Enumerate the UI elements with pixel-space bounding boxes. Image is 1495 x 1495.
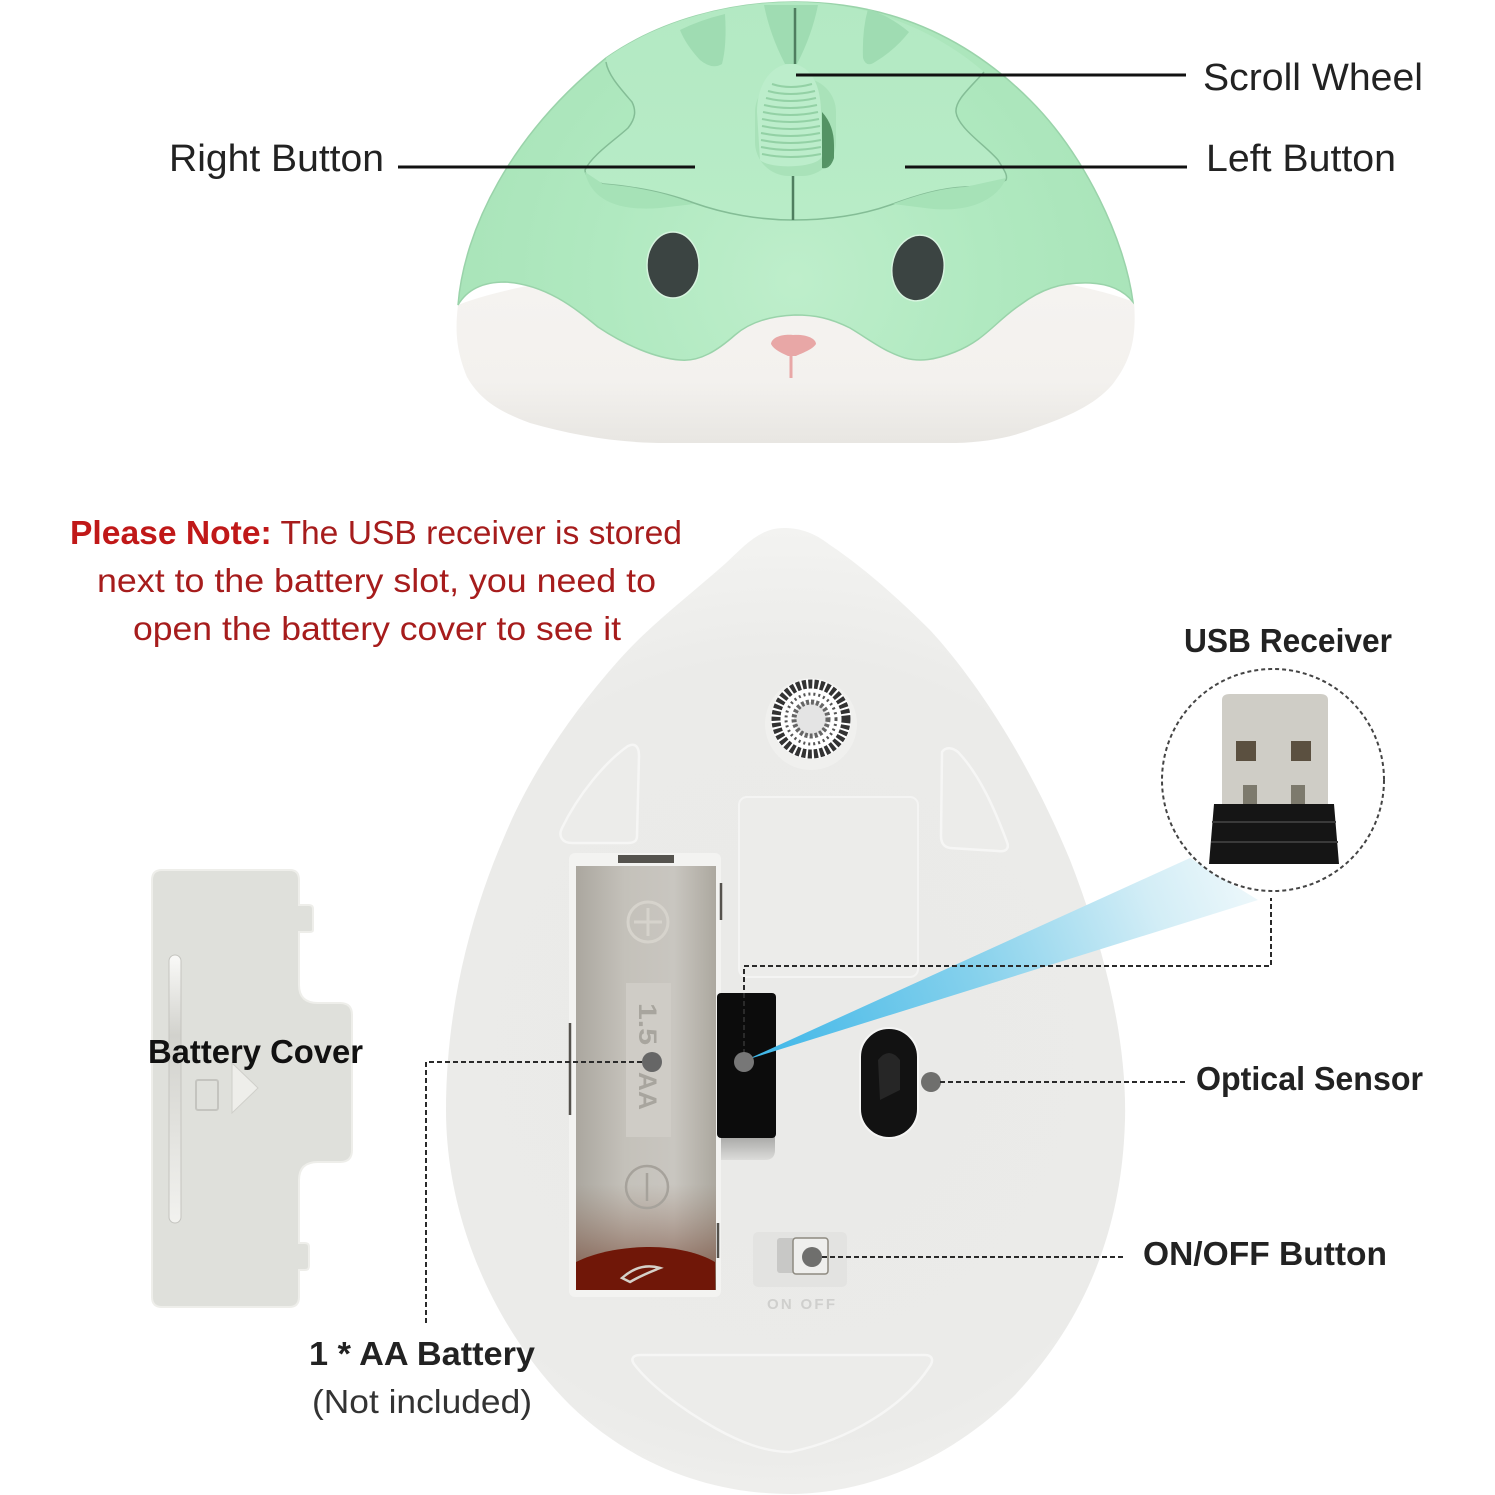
battery compartment: AA (633, 1072, 661, 1110)
label: battery (309, 1062, 642, 1420)
mouse cream belly (457, 263, 1135, 443)
dashed circle (1162, 669, 1384, 891)
battery cover (152, 870, 352, 1307)
cheek lobes (585, 172, 694, 209)
minus symbol (626, 1166, 668, 1208)
battery callout dot (642, 1052, 662, 1072)
receiver recess (717, 1130, 775, 1160)
label: right button: Right Button (169, 138, 384, 180)
left eye (647, 232, 699, 298)
battery top contact (618, 855, 674, 863)
label: battery: (Not included) (312, 1383, 532, 1420)
label: battery: 1 * AA Battery (309, 1335, 536, 1372)
cover slot (169, 955, 181, 1223)
side contacts (570, 883, 721, 1258)
cover lock icon (196, 1080, 218, 1110)
label: on/off button: ON/OFF Button (1143, 1235, 1387, 1272)
mouse green shell (458, 2, 1133, 360)
panel: underside of mouse (446, 528, 1125, 1494)
nose (771, 335, 816, 356)
mouth (790, 355, 792, 378)
button centre seam (793, 8, 795, 220)
note text: Please Note: The USB receiver is stored (70, 514, 682, 551)
embossed battery text: 1.5 (633, 1003, 661, 1045)
battery spring end (576, 1247, 715, 1290)
note text: open the battery cover to see it (133, 610, 621, 647)
button outline (585, 62, 1007, 220)
right eye (887, 231, 949, 305)
bottom foot pad (632, 1355, 932, 1452)
plus symbol (628, 902, 668, 942)
optical sensor (860, 1028, 918, 1138)
on/off switch: ON OFF (767, 1296, 835, 1313)
label: battery cover: Battery Cover (148, 1033, 363, 1070)
USB leader (744, 898, 1271, 1062)
scroll wheel (755, 64, 836, 176)
on/off switch (753, 1232, 847, 1313)
cover arrow symbol (232, 1063, 258, 1113)
USB receiver callout (1162, 622, 1392, 891)
battery compartment (569, 853, 721, 1297)
label: scroll wheel: Scroll Wheel (1203, 57, 1423, 99)
label: left button: Left Button (1206, 138, 1396, 180)
heading: USB Receiver (1184, 622, 1392, 659)
voltage plate (626, 983, 671, 1137)
USB plug metal (1222, 694, 1328, 806)
label: optical sensor: Optical Sensor (1196, 1060, 1423, 1097)
USB plug contacts (1236, 741, 1256, 761)
USB dot (734, 1052, 754, 1072)
left ear pad (560, 745, 639, 843)
light beam to USB receiver (746, 858, 1258, 1060)
certification sticker (765, 678, 857, 770)
mouse underside shell (446, 528, 1125, 1494)
note text: next to the battery slot, you need to (97, 562, 656, 599)
note text (70, 514, 682, 647)
right ear pad (941, 748, 1008, 851)
label: optical sensor (921, 1060, 1423, 1097)
button panel (585, 2, 1007, 220)
head stripes (680, 5, 909, 66)
label: on/off button (802, 1235, 1387, 1272)
panel: top view of hamster mouse (457, 2, 1135, 443)
USB plug body (1209, 804, 1339, 864)
USB receiver slot (717, 993, 776, 1138)
recessed label area (739, 797, 918, 977)
